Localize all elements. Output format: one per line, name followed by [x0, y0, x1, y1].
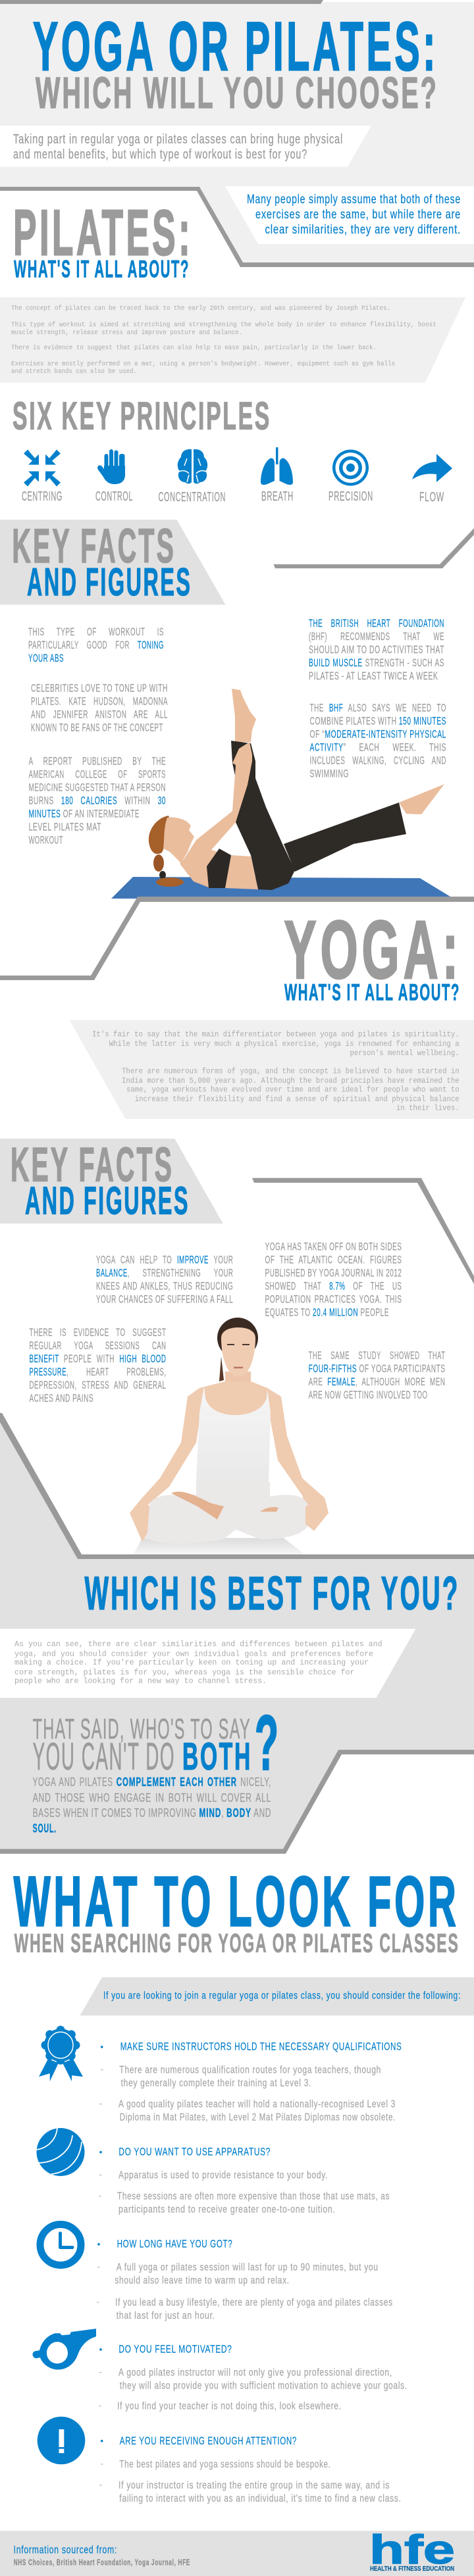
panel: do both: SOUL.	[33, 1822, 57, 1835]
logo: hfe: hfe	[369, 2527, 455, 2573]
item: attention	[38, 2417, 401, 2504]
intro panel	[0, 126, 371, 167]
item: motivation: If you find your teacher is not doing this, look elsewhere.	[117, 2401, 342, 2412]
illustration: yoga woman	[130, 1318, 329, 1555]
icon: lungs	[261, 447, 293, 485]
panel: do both: AND THOSE WHO ENGAGE IN BOTH WILL COVER ALL	[33, 1791, 271, 1804]
icon: ribbon	[39, 2026, 83, 2081]
panel: which is best text: yoga, and you should consider your own individual goals and preferences before	[14, 1649, 373, 1658]
mat	[111, 877, 450, 899]
panel: do both: BOTH	[182, 1735, 252, 1778]
item: apparatus	[36, 2128, 390, 2216]
item: apparatus: Apparatus is used to provide resistance to your body.	[118, 2170, 328, 2181]
item: time: should also leave time to warm up and relax.	[115, 2275, 290, 2287]
item: time	[40, 2225, 393, 2321]
panel: pilates description: muscle strength, release stress and improve posture and balance.	[11, 329, 242, 337]
logo: hfe: HEALTH & FITNESS EDUCATION	[370, 2565, 454, 2573]
panel: pilates description: Exercises are mostly performed on a mat, using a person's bodyweight. However, equipment such as gym balls	[11, 360, 395, 368]
icon: whistle	[33, 2329, 96, 2369]
principle labels: CENTRING	[22, 489, 63, 504]
panel: which is best text: people who are looking for a new way to channel stress.	[14, 1676, 267, 1685]
facts: pilates right	[309, 617, 446, 780]
facts: pilates left: KNOWN TO BE FANS OF THE CONCEPT	[31, 722, 163, 734]
sources: NHS Choices, British Heart Foundation, Yoga Journal, HFE	[14, 2557, 190, 2567]
icon: target	[332, 450, 369, 485]
panel: do both: BASES WHEN IT COMES TO IMPROVING MIND, BODY AND	[33, 1806, 271, 1820]
panel: which is best background	[0, 1418, 474, 1850]
item: motivation: A good pilates instructor will not only give you professional direction,	[118, 2367, 392, 2379]
facts: pilates left: AMERICAN COLLEGE OF SPORTS	[29, 768, 166, 781]
facts: pilates left: PILATES. KATE HUDSON, MADONNA	[31, 695, 168, 708]
principles row	[22, 447, 452, 505]
intro panel: Taking part in regular yoga or pilates classes can bring huge physical	[13, 132, 343, 147]
item: time: A full yoga or pilates session will last for up to 90 minutes, but you	[117, 2262, 379, 2273]
panel: pilates description: and stretch bands can also be used.	[11, 368, 137, 376]
heading: pilates	[13, 196, 193, 283]
panel: which is best text: As you can see, there are clear similarities and differences between pilates and	[14, 1640, 382, 1649]
panel: yoga key facts heading: KEY FACTS	[11, 1139, 174, 1192]
facts: yoga upper: SHOWED THAT 8.7% OF THE US	[265, 1280, 402, 1293]
sources	[14, 2544, 190, 2567]
panel: yoga key facts heading: AND FIGURES	[25, 1179, 190, 1223]
facts: yoga upper	[96, 1241, 402, 1319]
item: attention: If your instructor is treating the entire group in the same way, and is	[118, 2480, 390, 2491]
heading: pilates: PILATES:	[13, 196, 193, 268]
item: attention: ARE YOU RECEIVING ENOUGH ATTENTION?	[120, 2435, 297, 2447]
item: apparatus: participants tend to receive greater one-to-one tuition.	[118, 2204, 336, 2216]
item: motivation: DO YOU FEEL MOTIVATED?	[118, 2343, 232, 2356]
item: apparatus: DO YOU WANT TO USE APPARATUS?	[118, 2146, 271, 2158]
principle labels: CONTROL	[95, 489, 133, 504]
heading: six key principles: SIX KEY PRINCIPLES	[13, 395, 271, 438]
facts: pilates right: SWIMMING	[309, 768, 349, 780]
heading: pilates: WHAT'S IT ALL ABOUT?	[14, 255, 190, 283]
facts: pilates left: MINUTES OF AN INTERMEDIATE	[29, 808, 140, 820]
facts: yoga lower: BENEFIT PEOPLE WITH HIGH BLOOD	[29, 1352, 167, 1365]
item: qualifications	[39, 2026, 402, 2123]
panel: do both: THAT SAID, WHO'S TO SAY	[33, 1713, 251, 1745]
icon: flow arrow	[412, 454, 452, 482]
item: time: HOW LONG HAVE YOU GOT?	[117, 2238, 232, 2250]
facts: yoga upper: EQUATES TO 20.4 MILLION PEOPLE	[265, 1306, 389, 1319]
panel: pilates description: The concept of pilates can be traced back to the early 20th century, and was pioneered by Joseph Pilates.	[11, 305, 390, 312]
panel: yoga description: person's mental wellbeing.	[350, 1049, 460, 1058]
panel: yoga description: in their lives.	[396, 1104, 460, 1113]
panel: callout	[225, 186, 474, 244]
facts: pilates left: BURNS 180 CALORIES WITHIN 30	[29, 795, 166, 807]
panel: pilates description: There is evidence to suggest that pilates can also help to ease pain, particularly in the lower back.	[11, 344, 377, 352]
item: motivation	[33, 2329, 408, 2412]
facts: yoga upper: YOUR CHANCES OF SUFFERING A FALL	[96, 1293, 233, 1306]
icon: exclamation	[38, 2417, 85, 2464]
panel: checklist intro	[80, 1977, 474, 2016]
intro panel: and mental benefits, but which type of workout is best for you?	[13, 147, 307, 162]
facts: yoga lower: THERE IS EVIDENCE TO SUGGEST	[29, 1326, 166, 1339]
text: ?	[255, 1700, 278, 1787]
principle labels: BREATH	[261, 489, 294, 504]
facts: yoga lower: ACHES AND PAINS	[29, 1392, 93, 1404]
panel: do both: YOU CAN'T DO	[33, 1735, 175, 1778]
facts: pilates left	[28, 626, 168, 847]
facts: pilates left: LEVEL PILATES MAT	[29, 821, 101, 833]
icon: centring	[24, 450, 61, 487]
facts: pilates left: YOUR ABS	[28, 652, 64, 664]
panel: pilates key facts heading: AND FIGURES	[27, 560, 192, 604]
facts: yoga lower: PRESSURE, HEART PROBLEMS,	[29, 1366, 166, 1378]
item: attention: The best pilates and yoga sessions should be bespoke.	[119, 2459, 331, 2470]
facts: pilates left: A REPORT PUBLISHED BY THE	[29, 755, 166, 768]
item: time: that last for just an hour.	[117, 2310, 215, 2321]
facts: pilates left: AND JENNIFER ANISTON ARE ALL	[31, 708, 168, 721]
panel: which is best text: making a choice. If you're particularly keen on toning up and increasing your	[14, 1658, 369, 1668]
panel: do both	[33, 1700, 278, 1835]
facts: yoga lower	[29, 1326, 446, 1404]
facts: pilates left: THIS TYPE OF WORKOUT IS	[28, 626, 164, 638]
panel: which is best text: core strength, pilates is for you, whereas yoga is the sensible choice for	[14, 1668, 354, 1677]
facts: pilates left: WORKOUT	[29, 834, 63, 847]
principle labels	[22, 489, 444, 505]
panel: yoga key facts heading	[0, 1139, 223, 1224]
facts: pilates left: MEDICINE SUGGESTED THAT A PERSON	[29, 781, 166, 794]
facts: pilates right: COMBINE PILATES WITH 150 MINUTES	[309, 715, 446, 728]
icon: clock	[40, 2225, 81, 2266]
facts: yoga upper: YOGA CAN HELP TO IMPROVE YOUR	[96, 1254, 233, 1266]
icon: brain	[178, 449, 207, 483]
panel: yoga description	[70, 1020, 474, 1119]
panel: header	[0, 0, 474, 264]
principle labels: PRECISION	[329, 489, 373, 504]
item: qualifications: they generally complete their training at Level 3.	[121, 2078, 311, 2089]
facts: yoga upper: BALANCE, STRENGTHENING YOUR	[96, 1267, 233, 1279]
icon: exercise ball	[36, 2128, 84, 2176]
facts: pilates left: CELEBRITIES LOVE TO TONE UP WITH	[31, 682, 168, 695]
principle labels: CONCENTRATION	[158, 490, 226, 505]
panel: do both: YOGA AND PILATES COMPLEMENT EACH OTHER NICELY,	[33, 1775, 271, 1789]
panel: which is best text	[0, 1629, 416, 1698]
facts: yoga upper: KNEES AND ANKLES, THUS REDUCING	[96, 1280, 233, 1293]
panel: pilates key facts heading	[0, 520, 225, 605]
sources: Information sourced from:	[14, 2544, 117, 2556]
panel: pilates description	[0, 297, 465, 383]
facts: yoga lower: DEPRESSION, STRESS AND GENERAL	[29, 1379, 166, 1391]
panel: pilates key facts heading: KEY FACTS	[12, 520, 176, 573]
footer	[0, 2527, 474, 2576]
icon: hand	[97, 449, 125, 484]
facts: pilates left: PARTICULARLY GOOD FOR TONING	[28, 639, 164, 651]
illustration: pilates woman	[111, 689, 450, 899]
panel: pilates description: This type of workout is aimed at stretching and strengthening the whole body in order to enhance flexibility, boost	[11, 321, 436, 329]
facts: yoga lower: REGULAR YOGA SESSIONS CAN	[29, 1339, 166, 1352]
item: qualifications: There are numerous qualification routes for yoga teachers, though	[119, 2065, 381, 2076]
principle labels: FLOW	[419, 490, 444, 505]
